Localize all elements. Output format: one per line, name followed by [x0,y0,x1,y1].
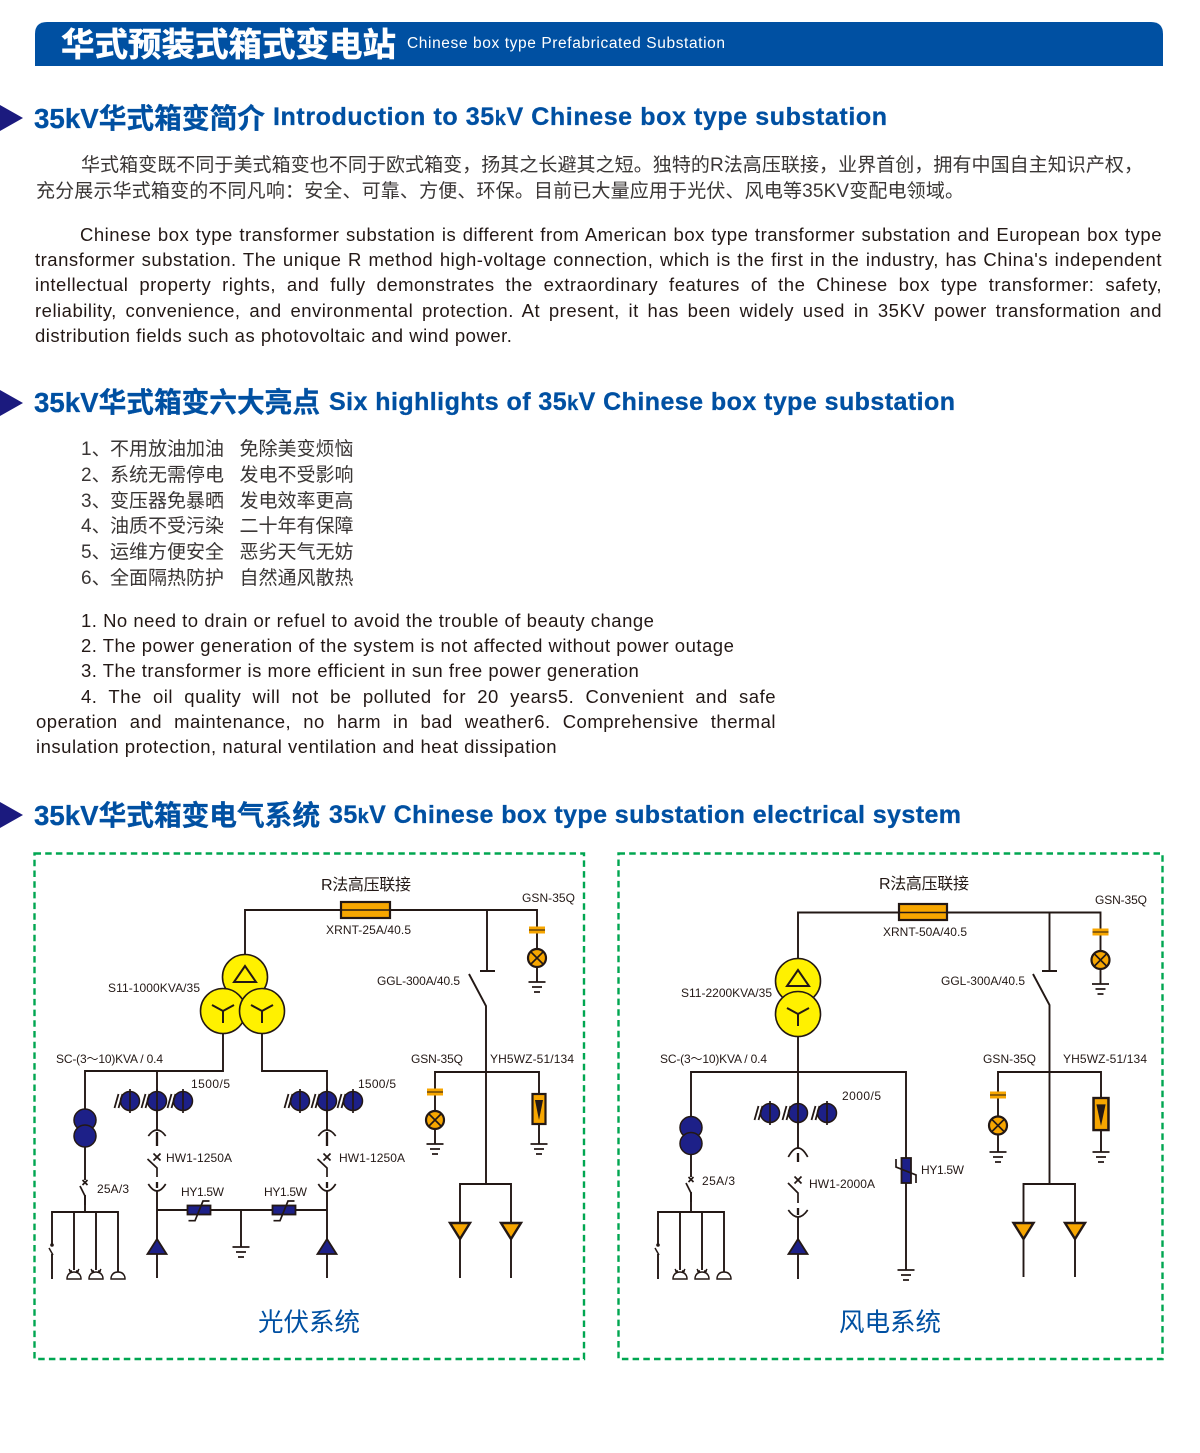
diagram labels: GGL-300A/40.5 [941,974,1025,988]
Chinese highlights list: 2、 [81,465,111,486]
Chinese highlights list: 二十年有保障 [240,515,354,537]
Chinese highlights list: 6、 [81,568,111,589]
arresters and ground [188,1201,296,1257]
diagram labels [660,875,1147,1191]
Chinese introduction text: 华式箱变既不同于美式箱变也不同于欧式箱变，扬其之长避其之短。独特的R法高压联接，业界首创，拥有中国自主知识产权， [81,154,1143,176]
diagram labels: S11-2200KVA/35 [681,986,772,1000]
breakers [148,1130,336,1254]
Chinese highlights list: 发电不受影响 [240,464,354,486]
diagram labels: XRNT-25A/40.5 [326,923,411,937]
Chinese highlights list: 运维方便安全 [110,541,224,563]
English introduction paragraph [35,224,1162,346]
diagram labels: 1500/5 [358,1077,396,1091]
diagram labels: HY1.5W [921,1163,965,1177]
Chinese highlights list: 5、 [81,542,111,563]
section heading: electrical system: 35kV Chinese box type substation electrical system [329,801,961,829]
transformer symbol [776,958,820,1036]
auxiliary transformer branch [656,1116,731,1279]
diagram labels: R法高压联接 [879,875,969,893]
Chinese highlights list: 4、 [81,516,111,537]
diagram labels: 25A/3 [97,1182,129,1196]
arrester and ground [896,1158,916,1280]
high-voltage feeder lines [49,910,539,1279]
diagram labels: HW1-1250A [166,1151,232,1165]
English highlights list: insulation protection, natural ventilation and heat dissipation [36,736,557,757]
English highlights list [36,610,776,757]
Chinese highlights list: 恶劣天气无妨 [240,541,354,563]
diagram labels: 1500/5 [191,1077,230,1091]
Chinese highlights list: 1、 [81,439,111,460]
diagram labels: HY1.5W [264,1185,308,1199]
English introduction paragraph: transformer substation. The unique R method high-voltage connection, which is the first in the industry, has China's independent [35,249,1162,270]
English introduction paragraph: Chinese box type transformer substation is different from American box type transformer substation and European box type [80,224,1162,245]
diagram labels: XRNT-50A/40.5 [883,925,967,939]
Chinese highlights list [81,438,354,589]
diagram labels: HW1-1250A [339,1151,405,1165]
panel: wind power system [618,854,1162,1359]
English introduction paragraph: distribution fields such as photovoltaic and wind power. [35,325,512,346]
breaker [788,1148,808,1254]
high-voltage feeder lines [655,912,1101,1279]
section heading: six highlights: 35kV华式箱变六大亮点 [34,387,320,418]
transformer symbol [200,954,284,1034]
surge protection and lamps [989,928,1110,1239]
English introduction paragraph: intellectual property rights, and fully demonstrates the extraordinary features of the Chinese box type transformer: safety, [35,274,1162,295]
fuse [341,902,390,918]
surge protection and lamps [426,926,548,1239]
section heading: introduction [0,103,887,134]
Chinese introduction text [36,154,1143,202]
Chinese highlights list: 自然通风散热 [240,567,354,589]
English highlights list: 2. The power generation of the system is not affected without power outage [81,635,734,656]
auxiliary transformer branch [50,1109,125,1279]
diagram labels: S11-1000KVA/35 [108,981,200,995]
Chinese highlights list: 不用放油加油 [110,438,224,460]
diagram labels: R法高压联接 [321,876,411,894]
diagram labels: HY1.5W [181,1185,225,1199]
diagram labels: YH5WZ-51/134 [1063,1052,1147,1066]
English highlights list: 4. The oil quality will not be polluted for 20 years5. Convenient and safe [81,686,776,707]
section heading: six highlights [0,387,955,418]
diagram labels: SC-(3～10)KVA / 0.4 [660,1052,767,1066]
Chinese highlights list: 免除美变烦恼 [240,438,354,460]
section heading: electrical system: 35kV华式箱变电气系统 [34,800,320,831]
English highlights list: 3. The transformer is more efficient in sun free power generation [81,660,639,681]
banner Chinese title: 华式预装式箱式变电站 [61,26,396,63]
English highlights list: 1. No need to drain or refuel to avoid the trouble of beauty change [81,610,654,631]
diagram labels [56,876,575,1199]
current transformers [754,1101,836,1125]
banner English subtitle: Chinese box type Prefabricated Substation [407,35,725,52]
diagram labels: YH5WZ-51/134 [490,1052,574,1066]
diagram labels: GSN-35Q [983,1052,1036,1066]
Chinese introduction text: 充分展示华式箱变的不同凡响：安全、可靠、方便、环保。目前已大量应用于光伏、风电等35KV变配电领域。 [36,180,964,202]
caption: photovoltaic system: 光伏系统 [258,1309,360,1337]
Chinese highlights list: 系统无需停电 [110,464,224,486]
English highlights list: operation and maintenance, no harm in bad weather6. Comprehensive thermal [36,711,776,732]
section heading: six highlights: Six highlights of 35kV Chinese box type substation [329,388,955,416]
caption: wind power system: 风电系统 [839,1309,941,1337]
diagram labels: GSN-35Q [411,1052,463,1066]
section heading: electrical system [0,800,961,831]
section heading: introduction: Introduction to 35kV Chinese box type substation [273,103,887,131]
Chinese highlights list: 全面隔热防护 [110,567,224,589]
diagram labels: HW1-2000A [809,1177,875,1191]
panel: photovoltaic system [34,854,584,1359]
diagram labels: 2000/5 [842,1089,881,1103]
title banner [35,22,1163,66]
Chinese highlights list: 3、 [81,491,111,512]
diagram labels: GSN-35Q [522,891,575,905]
current transformers [114,1089,362,1113]
diagram labels: 25A/3 [702,1174,735,1188]
diagram labels: SC-(3～10)KVA / 0.4 [56,1052,163,1066]
Chinese highlights list: 变压器免暴晒 [110,490,224,512]
English introduction paragraph: reliability, convenience, and environmental protection. At present, it has been widely used in 35KV power transformation and [35,300,1162,321]
section heading: introduction: 35kV华式箱变简介 [34,103,265,134]
Chinese highlights list: 油质不受污染 [110,515,224,537]
diagram labels: GSN-35Q [1095,893,1147,907]
diagram labels: GGL-300A/40.5 [377,974,460,988]
Chinese highlights list: 发电效率更高 [240,490,354,512]
fuse [899,904,947,920]
